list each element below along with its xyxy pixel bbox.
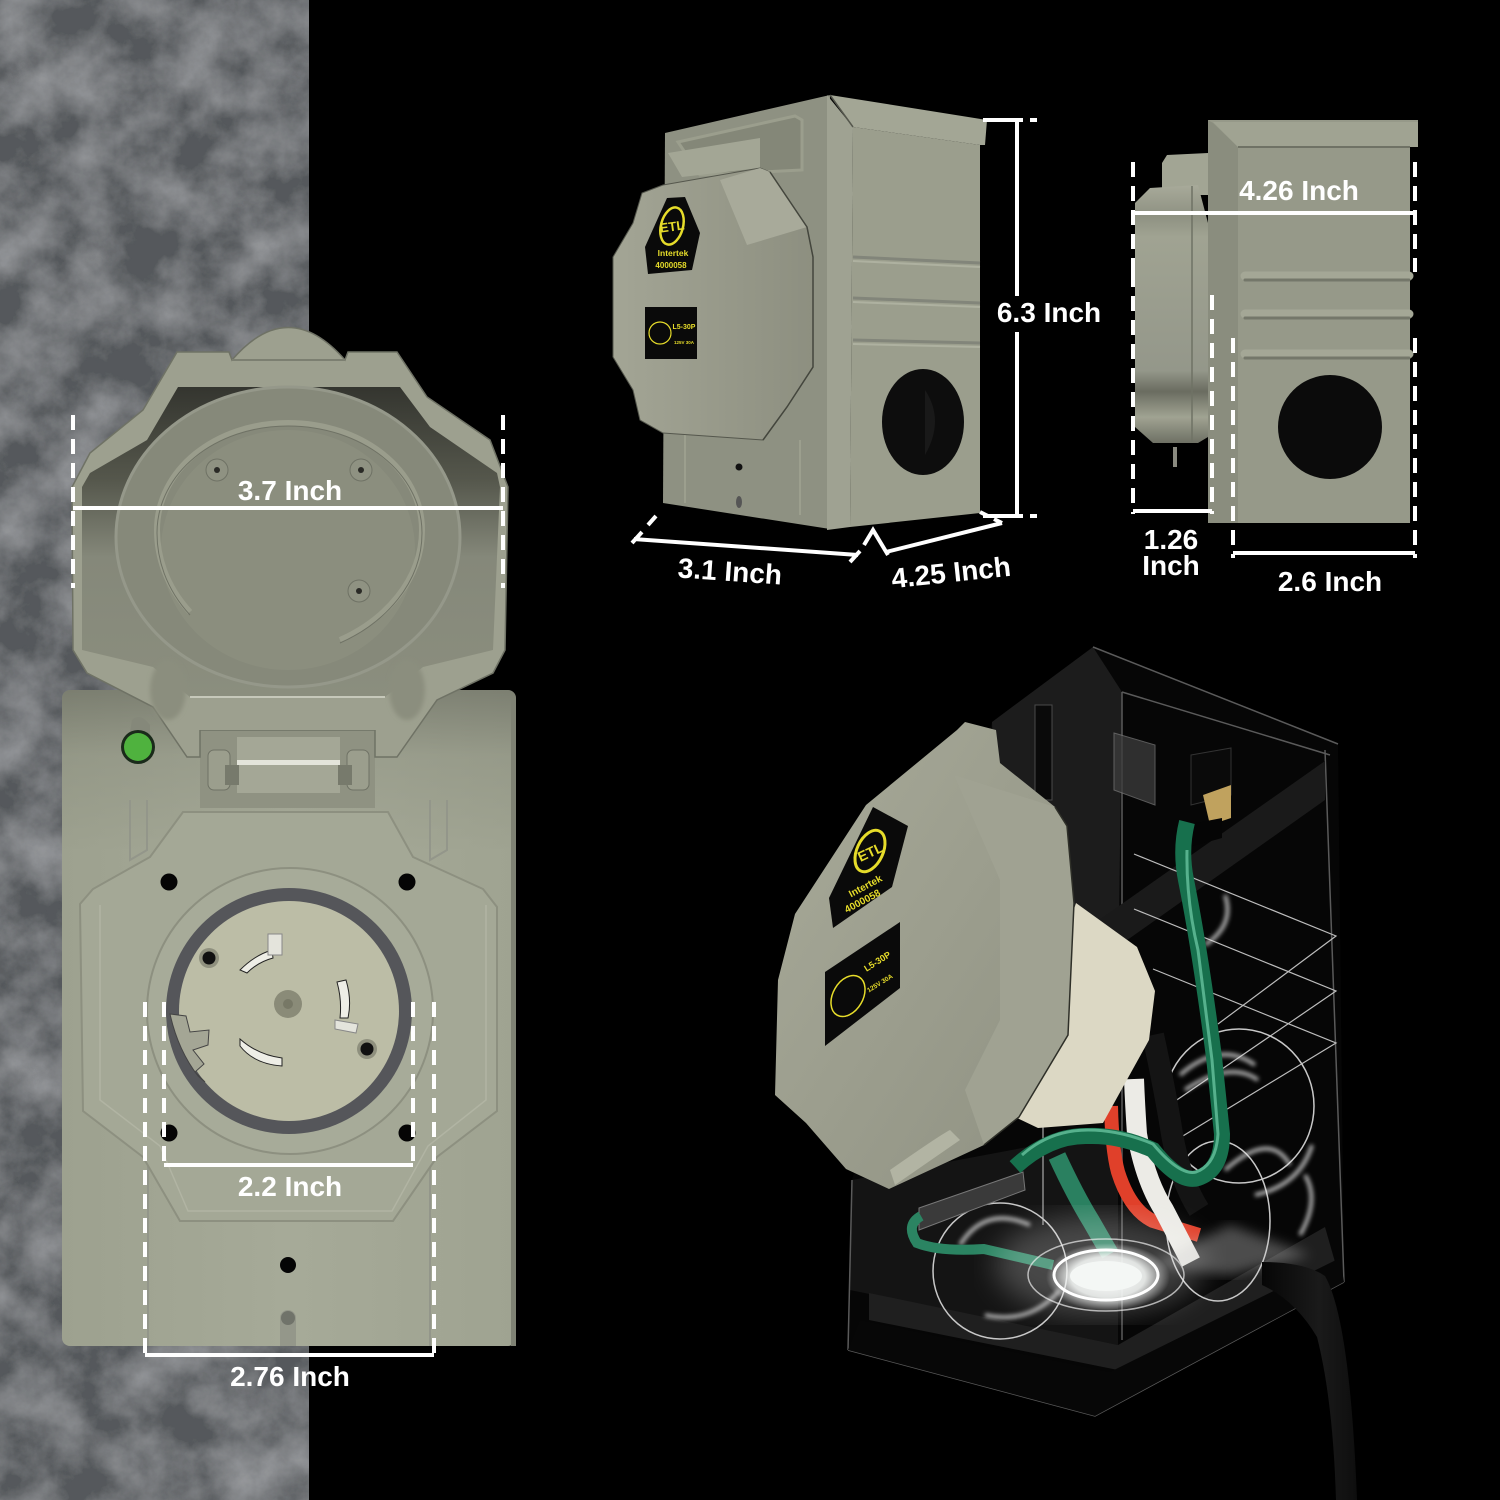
icon: ETL label large: Intertek [847,873,885,900]
box floor [848,1258,1344,1416]
panel: concrete wall [0,0,309,1500]
swirl highlights [960,895,1312,1317]
hinge [200,730,375,808]
label: L5-30P [645,307,697,359]
dimension: 3.7 inch: 3.7 Inch [238,475,342,506]
lid cavity [82,387,500,697]
dimension: 1.26 inch: 1.26 [1144,524,1198,555]
lid big ring [116,387,460,687]
dimension: 3.1 inch: 3.1 Inch [677,552,783,591]
icon: ETL label large [829,807,908,928]
side knockout [1278,375,1382,479]
lid [72,328,508,757]
grooves [853,257,980,343]
label: L5-30P large: L5-30P [862,949,893,974]
dimension: 6.3 inch: 6.3 Inch [997,297,1101,328]
front face [663,95,830,529]
box shell [848,647,1344,1416]
flange [80,812,497,1221]
lower bracket [919,1172,1025,1230]
corner strip [827,95,853,530]
icon: ETL label [645,197,700,274]
label: L5-30P: L5-30P [673,324,696,331]
pegs [206,459,228,481]
perspective view: closed box [613,95,987,530]
haze [1150,1225,1310,1275]
bracket: ground terminal [1186,748,1231,848]
screw holes [160,874,416,1346]
side grooves [1245,276,1409,354]
transparent cutaway box [775,647,1357,1500]
white lines [1134,854,1336,1145]
white boot [1015,903,1155,1128]
label: L5-30P: 125V 30A [674,340,695,345]
icon: ETL label large: ETL [855,839,886,865]
icon: ETL label: ETL [659,217,685,236]
icon: ETL label large: 4000058 [843,888,883,916]
lower holes [736,464,742,470]
power cord [1262,1262,1357,1500]
box edges [848,647,1344,1416]
dimension: 4.25 inch [864,512,1012,594]
icon: green LED [121,717,155,764]
wires [1153,1035,1199,1210]
side view: box [1135,120,1418,523]
label: L5-30P large [824,922,900,1046]
dimension: 3.1 inch [632,516,860,591]
bracket: translucent block [1114,733,1155,805]
dimension: 1.26 inch: Inch [1142,550,1200,581]
front view: inlet box [62,328,516,1346]
icon: ETL label: 4000058 [655,261,687,270]
latch [170,1014,209,1082]
plate grooves [130,800,447,1346]
shelves [1099,761,1325,960]
dimension: 2.6 inch: 2.6 Inch [1278,566,1382,597]
dimension: 2.2 inch: 2.2 Inch [238,1171,342,1202]
glow gland [995,1215,1205,1315]
cutaway cover [775,722,1074,1189]
dimension: 4.25 inch: 4.25 Inch [890,551,1012,594]
knockout [882,369,964,475]
right face [850,127,980,527]
top tab [668,138,760,177]
label: L5-30P large: 125V 30A [866,973,895,994]
prongs [240,950,273,973]
cover side facet [954,775,1074,1145]
side cover [1162,153,1208,195]
roof flap [830,95,987,145]
dimension: 1.26 inch [1133,272,1212,581]
icon: ETL label: Intertek [658,248,689,258]
dimension: 2.76 inch: 2.76 Inch [230,1361,350,1392]
socket [147,868,433,1154]
dimension: 4.26 inch: 4.26 Inch [1239,175,1359,206]
lid lower ledge [190,697,385,730]
knockout rings [933,1029,1314,1339]
cover [613,168,813,440]
